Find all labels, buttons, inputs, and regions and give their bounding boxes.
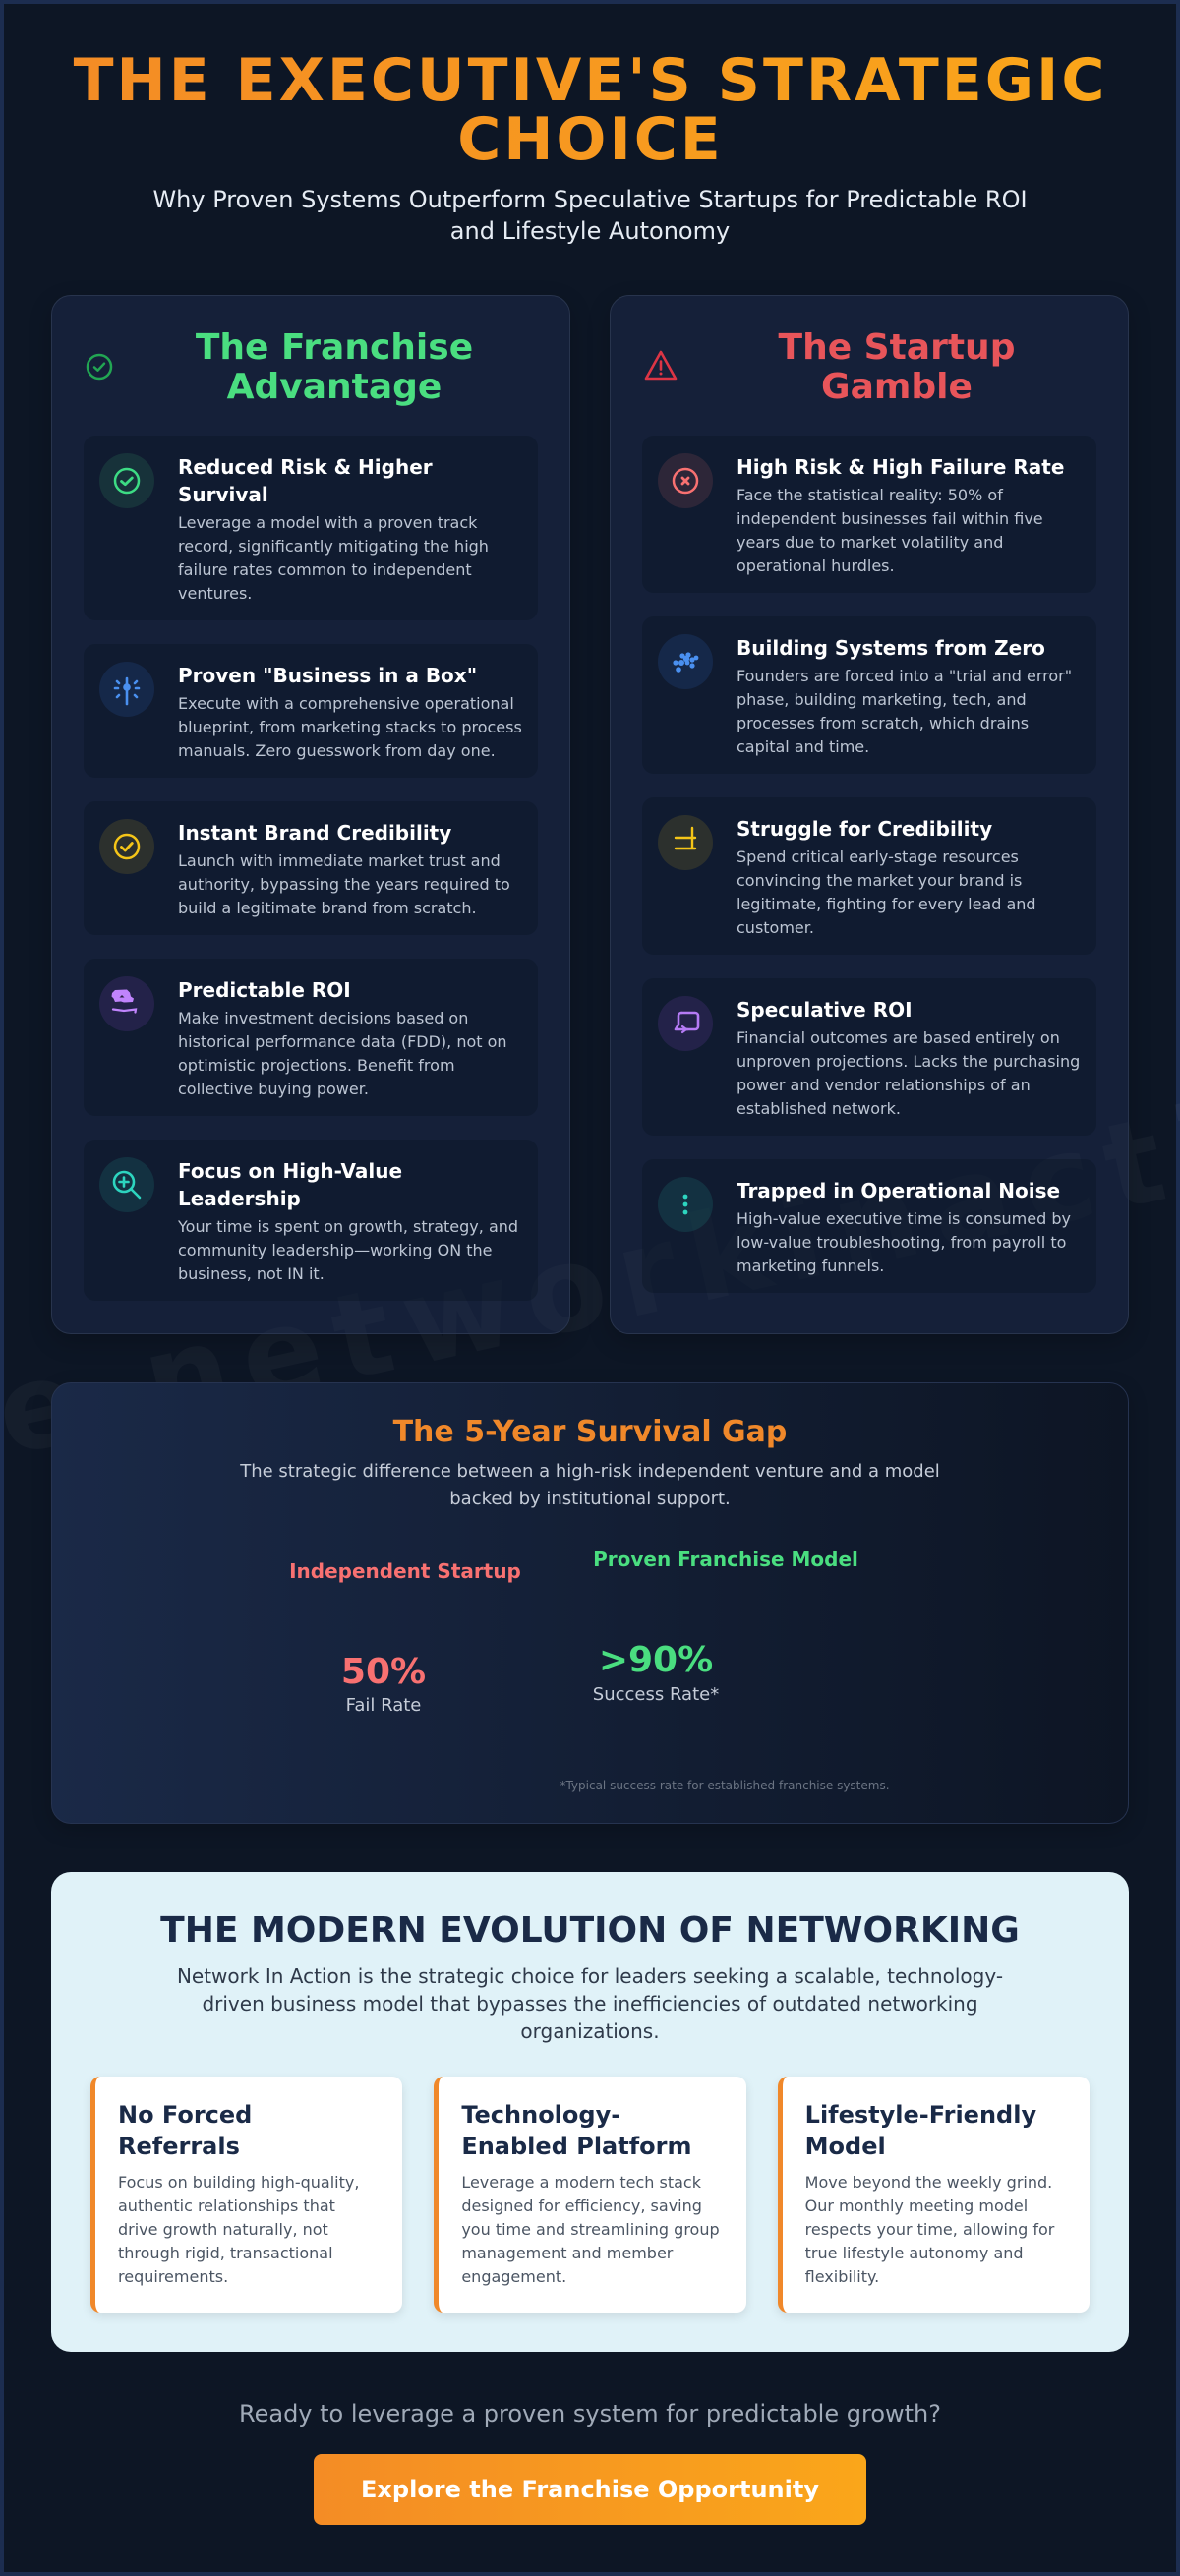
panel heading: The Franchise xyxy=(196,327,473,368)
item text: Survival xyxy=(178,483,268,506)
item: predictable roi xyxy=(84,959,538,1116)
item: operational noise xyxy=(642,1159,1096,1293)
footnote: *Typical success rate for established franchise systems. xyxy=(560,1779,890,1792)
subtitle: and Lifestyle Autonomy xyxy=(450,217,730,245)
card title: Referrals xyxy=(118,2133,240,2160)
item text: failure rates common to independent xyxy=(178,560,472,579)
item text: Founders are forced into a "trial and error" xyxy=(737,667,1072,685)
title xyxy=(73,51,1108,169)
icon: warning triangle xyxy=(645,350,677,380)
item text: Make investment decisions based on xyxy=(178,1009,468,1027)
item text: Focus on High-Value xyxy=(178,1159,402,1183)
item text: business, not IN it. xyxy=(178,1264,324,1283)
stat: fail rate: 50% xyxy=(341,1652,426,1692)
item text: convincing the market your brand is xyxy=(737,871,1022,890)
icon: blue burst xyxy=(99,662,154,717)
card text: requirements. xyxy=(118,2267,228,2286)
card text: management and member xyxy=(461,2244,673,2262)
card text: Leverage a modern tech stack xyxy=(461,2173,701,2192)
icon: panel check circle xyxy=(87,354,112,380)
item text: High-value executive time is consumed by xyxy=(737,1209,1071,1228)
icon: teal dots xyxy=(658,1177,713,1232)
panel heading xyxy=(196,327,473,407)
card text: engagement. xyxy=(461,2267,566,2286)
card text xyxy=(118,2173,359,2286)
item text: Building Systems from Zero xyxy=(737,636,1045,660)
subtitle xyxy=(152,186,1028,245)
section heading: The 5-Year Survival Gap xyxy=(393,1415,787,1449)
item text: legitimate, fighting for every lead and xyxy=(737,895,1036,913)
subtitle: Why Proven Systems Outperform Speculative Startups for Predictable ROI xyxy=(152,186,1028,213)
item text: authority, bypassing the years required to xyxy=(178,875,510,894)
card text: true lifestyle autonomy and xyxy=(805,2244,1024,2262)
item text: marketing funnels. xyxy=(737,1257,884,1275)
item text: established network. xyxy=(737,1099,901,1118)
section description: organizations. xyxy=(520,2020,660,2043)
card title: Technology- xyxy=(461,2101,620,2129)
call to action question: Ready to leverage a proven system for predictable growth? xyxy=(239,2400,941,2428)
item: business in a box xyxy=(84,644,538,778)
label: independent startup: Independent Startup xyxy=(289,1559,521,1583)
item text: manuals. Zero guesswork from day one. xyxy=(178,741,496,760)
panel heading xyxy=(779,327,1015,407)
item text: unproven projections. Lacks the purchasing xyxy=(737,1052,1080,1071)
item text: operational hurdles. xyxy=(737,556,895,575)
title: THE EXECUTIVE'S STRATEGIC xyxy=(74,46,1107,115)
item text xyxy=(737,1179,1071,1275)
card: technology-enabled platform xyxy=(434,2077,746,2313)
card text: drive growth naturally, not xyxy=(118,2220,328,2239)
icon: yellow bracket xyxy=(658,815,713,870)
item: brand credibility xyxy=(84,801,538,935)
item text: Proven "Business in a Box" xyxy=(178,664,477,687)
item text: historical performance data (FDD), not on xyxy=(178,1032,507,1051)
card title xyxy=(118,2101,252,2160)
section description: The strategic difference between a high-risk independent venture and a model xyxy=(240,1461,940,1482)
item text xyxy=(737,636,1072,756)
item text xyxy=(737,455,1064,575)
item text: Your time is spent on growth, strategy, and xyxy=(178,1217,518,1236)
section description xyxy=(177,1964,1003,2043)
panel heading: The Startup xyxy=(779,327,1015,368)
title: CHOICE xyxy=(457,105,724,174)
stat: success rate: >90% xyxy=(599,1640,713,1680)
call to action button: Explore the Franchise Opportunity xyxy=(361,2476,819,2503)
card text: designed for efficiency, saving xyxy=(461,2196,702,2215)
item text: blueprint, from marketing stacks to process xyxy=(178,718,522,736)
card: lifestyle-friendly model xyxy=(778,2077,1090,2313)
item text: independent businesses fail within five xyxy=(737,509,1043,528)
card title: Lifestyle-Friendly xyxy=(805,2101,1036,2129)
icon: teal magnifier xyxy=(99,1157,154,1212)
item text xyxy=(178,1159,518,1283)
panel: the startup gamble xyxy=(610,295,1129,1334)
card title: Model xyxy=(805,2133,886,2160)
item text: Leadership xyxy=(178,1187,301,1210)
icon: blue dots xyxy=(658,634,713,689)
card title xyxy=(805,2101,1036,2160)
icon: green check xyxy=(99,453,154,508)
stat label: success rate: Success Rate* xyxy=(593,1684,719,1705)
item text xyxy=(737,998,1080,1118)
card text: Focus on building high-quality, xyxy=(118,2173,359,2192)
item: struggle for credibility xyxy=(642,797,1096,955)
card: no forced referrals xyxy=(90,2077,402,2313)
item text: Speculative ROI xyxy=(737,998,913,1022)
item text: years due to market volatility and xyxy=(737,533,1003,552)
item text: ventures. xyxy=(178,584,252,603)
section description: Network In Action is the strategic choice for leaders seeking a scalable, technology- xyxy=(177,1964,1003,1988)
card text xyxy=(805,2173,1054,2286)
item text: collective buying power. xyxy=(178,1080,369,1098)
item text: Face the statistical reality: 50% of xyxy=(737,486,1003,504)
item text: Predictable ROI xyxy=(178,978,351,1002)
item text: Launch with immediate market trust and xyxy=(178,851,501,870)
card text xyxy=(461,2173,720,2286)
section description xyxy=(240,1461,940,1509)
item text: Reduced Risk & Higher xyxy=(178,455,433,479)
item: high risk xyxy=(642,436,1096,593)
panel heading: Advantage xyxy=(227,367,442,407)
item text: Struggle for Credibility xyxy=(737,817,992,841)
item text: capital and time. xyxy=(737,737,869,756)
item text xyxy=(737,817,1036,937)
item text: Trapped in Operational Noise xyxy=(737,1179,1060,1202)
panel: 5-year survival gap xyxy=(51,1382,1129,1824)
item: building systems xyxy=(642,616,1096,774)
item text: low-value troubleshooting, from payroll to xyxy=(737,1233,1066,1252)
item text: Financial outcomes are based entirely on xyxy=(737,1028,1060,1047)
item text xyxy=(178,664,522,760)
item text: power and vendor relationships of an xyxy=(737,1076,1031,1094)
call to action button xyxy=(314,2454,866,2525)
item text: record, significantly mitigating the high xyxy=(178,537,489,556)
panel heading: Gamble xyxy=(821,367,973,407)
item: reduced risk xyxy=(84,436,538,620)
section description: backed by institutional support. xyxy=(449,1489,731,1509)
item: high-value leadership xyxy=(84,1140,538,1301)
icon: red x circle xyxy=(658,453,713,508)
section description: driven business model that bypasses the inefficiencies of outdated networking xyxy=(202,1992,978,2016)
item: speculative roi xyxy=(642,978,1096,1136)
section heading: THE MODERN EVOLUTION OF NETWORKING xyxy=(160,1910,1020,1951)
card text: authentic relationships that xyxy=(118,2196,335,2215)
item text: customer. xyxy=(737,918,814,937)
card text: Our monthly meeting model xyxy=(805,2196,1028,2215)
item text: Instant Brand Credibility xyxy=(178,821,451,845)
item text: build a legitimate brand from scratch. xyxy=(178,899,477,917)
item text: Spend critical early-stage resources xyxy=(737,848,1019,866)
card title: Enabled Platform xyxy=(461,2133,691,2160)
card text: through rigid, transactional xyxy=(118,2244,333,2262)
item text xyxy=(178,455,489,603)
icon: yellow check xyxy=(99,819,154,874)
item text xyxy=(178,978,507,1098)
card text: you time and streamlining group xyxy=(461,2220,720,2239)
item text: community leadership—working ON the xyxy=(178,1241,493,1259)
icon: purple money xyxy=(99,976,154,1031)
card text: respects your time, allowing for xyxy=(805,2220,1054,2239)
panel: modern evolution of networking xyxy=(51,1872,1129,2352)
item text: optimistic projections. Benefit from xyxy=(178,1056,455,1075)
label: proven franchise model: Proven Franchise Model xyxy=(593,1548,858,1571)
card text: Move beyond the weekly grind. xyxy=(805,2173,1052,2192)
card text: flexibility. xyxy=(805,2267,879,2286)
item text xyxy=(178,821,510,917)
stat label: fail rate: Fail Rate xyxy=(346,1695,421,1716)
icon: purple square arrow xyxy=(658,996,713,1051)
item text: Leverage a model with a proven track xyxy=(178,513,477,532)
item text: Execute with a comprehensive operational xyxy=(178,694,514,713)
item text: phase, building marketing, tech, and xyxy=(737,690,1027,709)
panel: the franchise advantage xyxy=(51,295,570,1334)
item text: High Risk & High Failure Rate xyxy=(737,455,1064,479)
card title: No Forced xyxy=(118,2101,252,2129)
card title xyxy=(461,2101,691,2160)
item text: processes from scratch, which drains xyxy=(737,714,1029,732)
